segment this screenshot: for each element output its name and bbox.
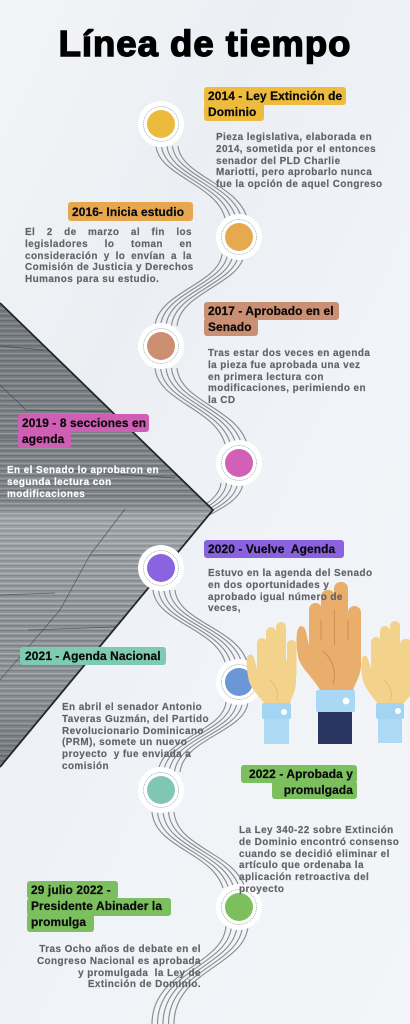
text 2022: de Dominio encontró consenso [239,837,399,848]
text 2017: la CD [208,395,236,406]
text 2014 [216,132,383,190]
label 2014 [204,87,346,121]
text 2021: En abril el senador Antonio [62,702,202,713]
text 2016: El 2 de marzo al fin los [25,227,192,238]
text 2016: legisladores lo toman en [25,239,192,250]
building photo [0,303,213,767]
label 29 julio 2022 [27,881,171,932]
text 2014: Pieza legislativa, elaborada en [216,132,372,143]
text 2016: Comisión de Justicia y Derechos [25,262,194,273]
text 29 julio 2022: y promulgada la Ley de [78,968,201,979]
label 2019 [18,414,149,448]
label 2016 [68,202,193,221]
text 2017: Tras estar dos veces en agenda [208,348,370,359]
text 2022: proyecto [239,884,284,895]
text 2017: modificaciones, perimiendo en [208,383,366,394]
step 2 marker [216,214,262,260]
label 29 julio 2022: promulga [31,915,86,929]
label 29 julio 2022: 29 julio 2022 - [31,883,111,897]
step 7 marker [138,767,184,813]
text 29 julio 2022: Tras Ocho años de debate en el [39,944,201,955]
text 2016: Humanos para su estudio. [25,274,159,285]
label 2014: 2014 - Ley Extinción de [208,89,342,103]
label 2017: Senado [208,320,252,334]
text 2014: fue la opción de aquel Congreso [216,179,383,190]
timeline wavy lines [151,146,248,1024]
text 2020: en dos oportunidades y [208,580,329,591]
text 2022: La Ley 340-22 sobre Extinción [239,825,394,836]
text 2016: consideración y lo envían a la [25,251,192,262]
step 4 marker [216,440,262,486]
label 2017: 2017 - Aprobado en el [208,304,334,318]
left hand [247,622,296,744]
hands illustration [246,582,410,744]
text 2014: 2014, sometida por el entonces [216,144,376,155]
text 2019 [7,465,159,500]
text 2017: en primera lectura con [208,372,324,383]
event 29 julio 2022 [27,881,201,990]
label 2022 [241,765,357,799]
label 2020: 2020 - Vuelve Agenda [208,542,335,556]
text 2019: modificaciones [7,489,85,500]
text 2017: la pieza fue aprobada una vez [208,360,360,371]
text 2020 [208,568,372,614]
text 2021: Revolucionario Dominicano [62,726,204,737]
step 1 marker [138,101,184,147]
label 2019: agenda [22,432,64,446]
text 2022: aplicación retroactiva del [239,872,369,883]
step 6 marker [216,659,262,705]
text 29 julio 2022 [37,944,201,990]
text 2017 [208,348,370,406]
label 29 julio 2022: Presidente Abinader la [31,899,162,913]
event 2019 [7,414,159,500]
label 2019: 2019 - 8 secciones en [22,416,146,430]
text 2019: En el Senado lo aprobaron en [7,465,159,476]
text 2020: Estuvo en la agenda del Senado [208,568,372,579]
event 2020 [204,540,372,614]
text 2021 [62,702,209,772]
event 2014 [204,87,383,190]
step 8 marker [216,884,262,930]
label 2022: promulgada [284,783,353,797]
text 2016 [25,227,194,285]
event 2016 [25,202,194,285]
label 2021: 2021 - Agenda Nacional [25,649,161,663]
text 2021: (PRM), somete un nuevo [62,737,187,748]
text 2014: Mariotti, pero aprobarlo nunca [216,167,372,178]
text 2021: comisión [62,761,109,772]
text 2022: artículo que ordenaba la [239,860,364,871]
text 2021: proyecto y fue enviada a [62,749,191,760]
text 29 julio 2022: Congreso Nacional es aprobada [37,956,201,967]
text 2021: Taveras Guzmán, del Partido [62,714,209,725]
text 2022: cuando se decidió eliminar el [239,849,390,860]
label 2016: 2016- Inicia estudio [72,205,184,219]
step 5 marker [138,545,184,591]
event 2017 [204,302,370,406]
event 2021 [20,647,209,772]
title: Línea de tiempo [59,23,351,64]
label 2022: 2022 - Aprobada y [249,767,353,781]
text 2020: veces, [208,603,241,614]
text 29 julio 2022: Extinción de Dominio. [88,979,201,990]
label 2017 [204,302,339,336]
right hand [361,621,410,743]
label 2014: Dominio [208,105,256,119]
text 2019: segunda lectura con [7,477,112,488]
text 2022 [239,825,399,895]
text 2014: senador del PLD Charlie [216,156,341,167]
text 2020: aprobado igual número de [208,592,343,603]
centre hand [296,582,361,744]
event 2022 [239,765,399,895]
step 3 marker [138,323,184,369]
